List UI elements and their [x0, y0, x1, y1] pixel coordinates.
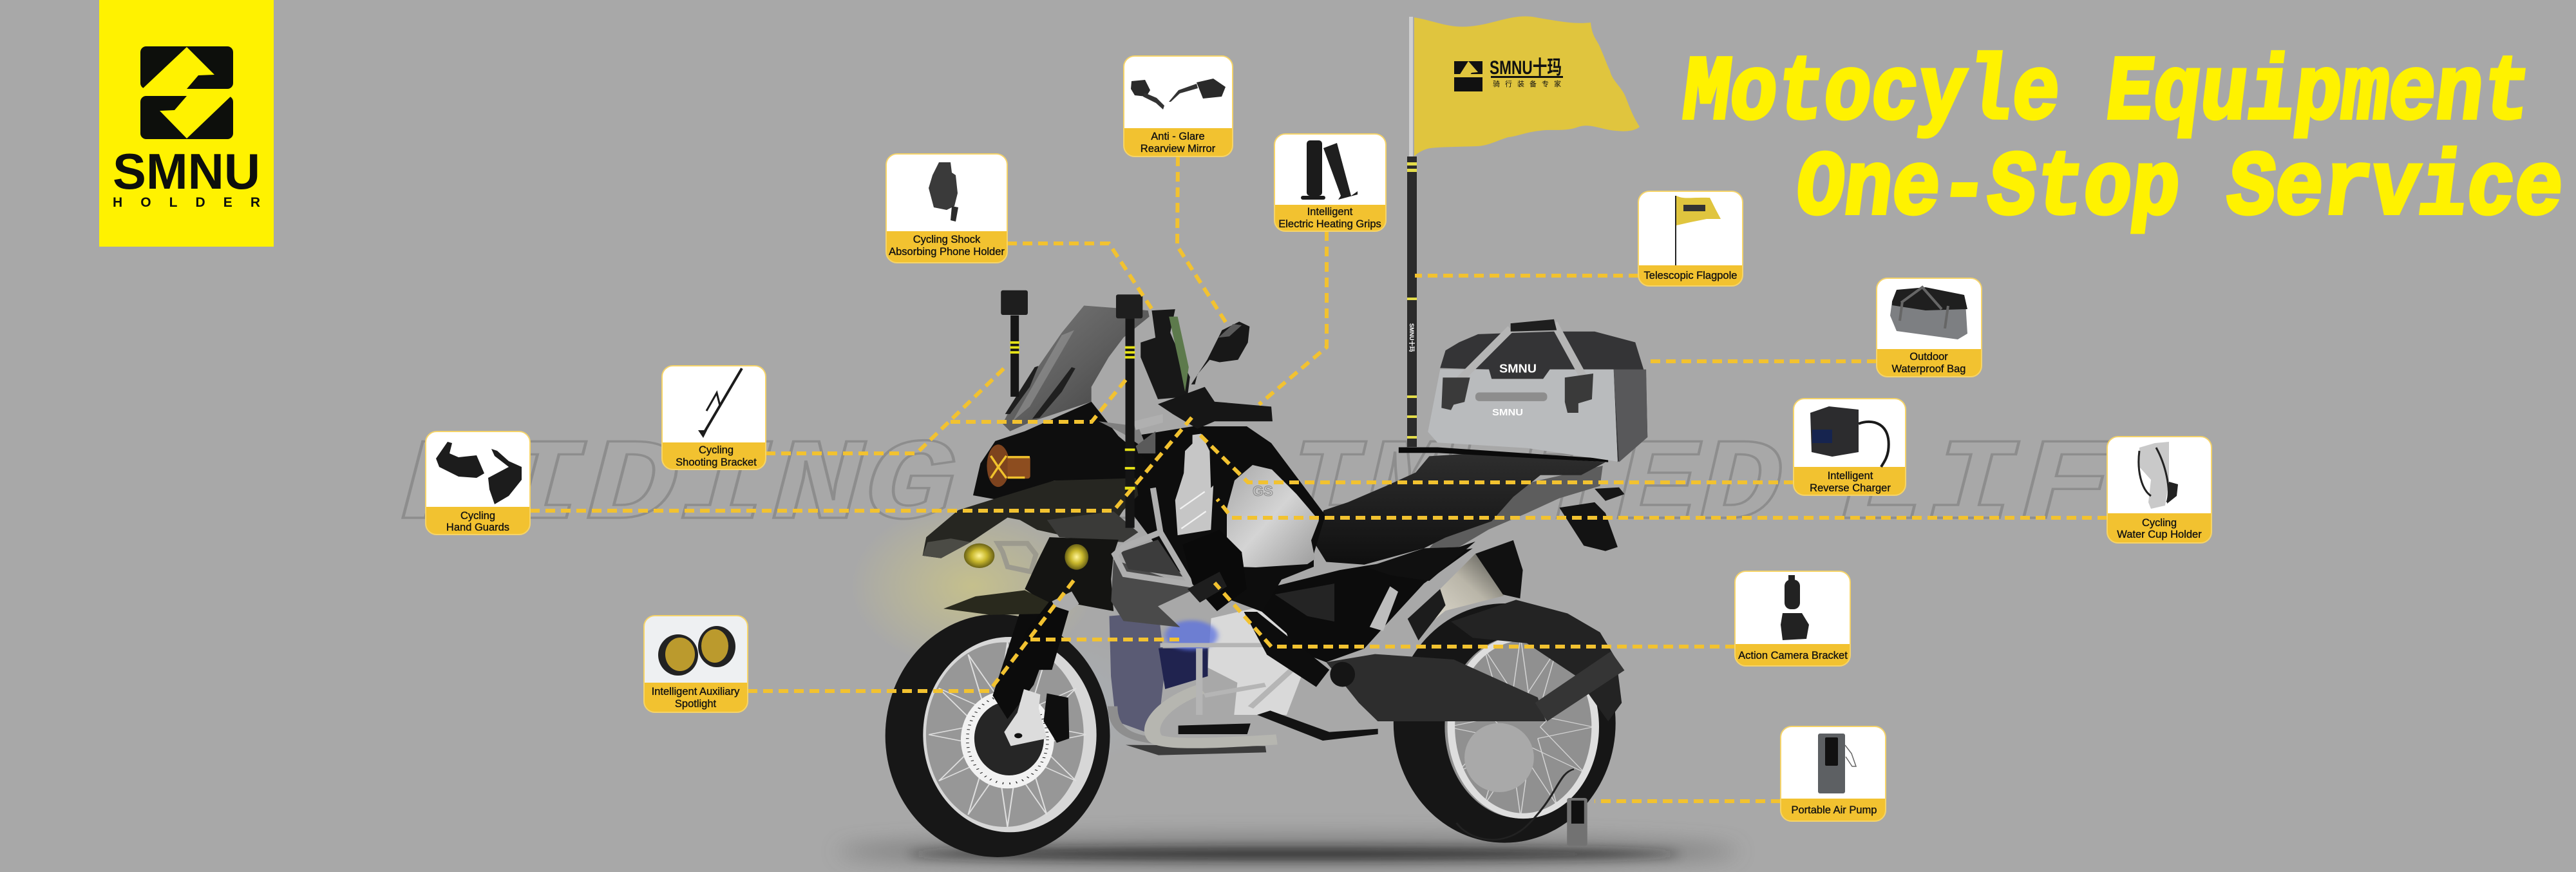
rearview mirror — [1191, 321, 1249, 384]
card: anti-glare rearview mirror: Rearview Mirror — [1141, 143, 1216, 155]
fuel tank — [1133, 426, 1325, 612]
upper fairing — [973, 402, 1148, 500]
tail — [1559, 502, 1618, 551]
tank, bottle, fairing and controls: GS — [1253, 483, 1273, 499]
action camera left — [1010, 316, 1019, 397]
card: phone holder — [886, 154, 1007, 263]
card: outdoor waterproof bag: Outdoor — [1909, 351, 1948, 363]
card: auxiliary spotlight: Spotlight — [675, 698, 717, 710]
dashed callout lines — [530, 156, 2107, 801]
front wheel — [886, 612, 1110, 857]
card: anti-glare rearview mirror: Anti - Glare — [1151, 131, 1205, 142]
watermark: riding unlimited life: RIDING — [401, 422, 957, 553]
logo panel — [99, 0, 274, 247]
waterproof bag: SMNU — [1499, 362, 1537, 375]
headlight — [987, 444, 1010, 487]
card: telescopic flagpole: Telescopic Flagpole — [1644, 270, 1737, 281]
card: electric heating grips — [1274, 134, 1386, 231]
card: hand guards: Hand Guards — [446, 522, 509, 533]
card: action camera bracket — [1735, 571, 1850, 666]
card: reverse charger: Intelligent — [1828, 470, 1873, 482]
card: action camera bracket: Action Camera Bracket — [1738, 650, 1848, 661]
logo panel: HOLDER — [113, 195, 260, 210]
card: anti-glare rearview mirror — [1124, 56, 1233, 156]
waterproof bag: SMNU — [1492, 407, 1523, 418]
card: water cup holder — [2107, 437, 2211, 543]
flagpole: SMNU十玛 — [1408, 323, 1416, 352]
card: water cup holder: Cycling — [2142, 517, 2177, 529]
card: hand guards: Cycling — [460, 510, 495, 522]
watermark: riding unlimited life: LIFE — [1835, 422, 2205, 553]
motorcycle — [837, 290, 1739, 867]
water bottle and holder — [1175, 433, 1213, 535]
seat — [1312, 453, 1605, 565]
card: reverse charger — [1794, 399, 1906, 495]
handlebar and grip — [1158, 387, 1273, 429]
card: portable air pump: Portable Air Pump — [1792, 804, 1877, 816]
watermark: riding unlimited life — [401, 422, 2205, 553]
card: electric heating grips: Intelligent — [1307, 206, 1353, 218]
flag: 骑行装备专家 — [1493, 79, 1561, 88]
portable air pump on ground — [1457, 769, 1587, 846]
logo panel: SMNU — [113, 143, 260, 200]
rear wheel — [1394, 603, 1616, 843]
card: portable air pump — [1781, 726, 1886, 821]
flagpole — [1407, 17, 1417, 447]
card: outdoor waterproof bag — [1877, 278, 1982, 377]
title — [1677, 42, 2569, 241]
phone holder — [1141, 309, 1190, 399]
rear fender — [1451, 600, 1622, 721]
side dark panels near tank — [1182, 530, 1247, 611]
action camera right — [1125, 318, 1135, 528]
card: auxiliary spotlight: Intelligent Auxiliary — [652, 686, 740, 697]
centre dark mass — [1025, 537, 1119, 611]
watermark: riding unlimited life: UNLIMITED — [1033, 422, 1783, 553]
windscreen — [1003, 305, 1150, 431]
card: phone holder: Cycling Shock — [913, 234, 981, 245]
rear rack — [1399, 447, 1608, 462]
swingarm — [1326, 654, 1546, 721]
card: telescopic flagpole — [1638, 191, 1743, 286]
card: shooting bracket: Shooting Bracket — [676, 457, 757, 468]
engine and exhaust headers — [1109, 607, 1378, 755]
beak — [923, 478, 1138, 558]
fender — [943, 590, 1052, 615]
card: auxiliary spotlight — [644, 616, 748, 712]
waterproof bag — [1428, 319, 1647, 462]
silver handlebar section — [1133, 414, 1163, 430]
frame — [1253, 548, 1473, 662]
tank, bottle, fairing and controls — [1133, 426, 1325, 612]
card: shooting bracket — [662, 366, 766, 469]
card: outdoor waterproof bag: Waterproof Bag — [1892, 363, 1965, 375]
fork top — [1015, 602, 1072, 670]
flag — [1414, 16, 1640, 156]
flag: SMNU十玛 — [1490, 57, 1562, 79]
fog light left and bracket — [998, 544, 1036, 572]
silencer — [1475, 540, 1523, 598]
card: shooting bracket: Cycling — [699, 444, 734, 456]
rear bodywork — [1253, 447, 1624, 721]
radiator cover and crash bar — [1111, 560, 1193, 627]
card: hand guards — [426, 431, 530, 535]
ground shadow and light glow — [837, 502, 1739, 867]
card: phone holder: Absorbing Phone Holder — [889, 246, 1005, 258]
card: electric heating grips: Electric Heating Grips — [1278, 218, 1381, 230]
card: water cup holder: Water Cup Holder — [2117, 529, 2202, 540]
card: reverse charger: Reverse Charger — [1810, 482, 1891, 494]
